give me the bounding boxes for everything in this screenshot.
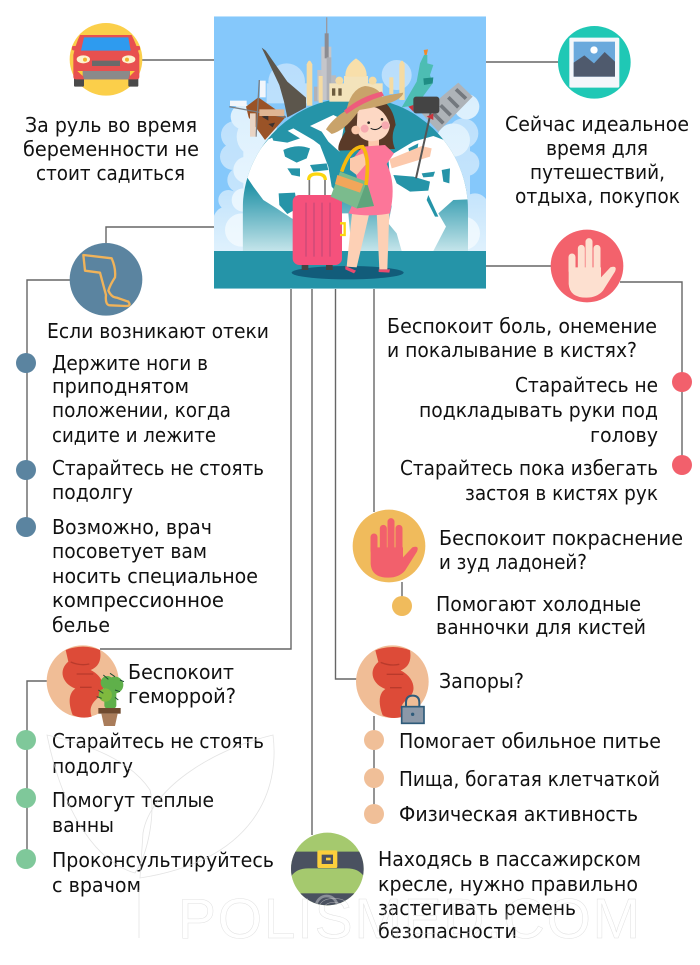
- text: ideal time: путешествий,: [530, 160, 665, 184]
- bullet: cold baths: Помогают холодные: [436, 592, 641, 616]
- bullet: do not stand: Старайтесь не стоять: [52, 729, 264, 753]
- hair: [338, 104, 396, 151]
- text: seat belt advice: Находясь в пассажирском: [378, 847, 641, 871]
- panel: wrist pain: [387, 314, 692, 505]
- heading: palm redness: [439, 526, 683, 574]
- bullet: do not stand: подолгу: [52, 480, 133, 504]
- icon: leg: [70, 243, 142, 316]
- bullet: avoid stagnation: застоя в кистях рук: [465, 481, 658, 505]
- bullet: compression wear: [16, 515, 258, 637]
- heading: wrist pain: и покалывание в кистях?: [387, 338, 637, 362]
- heading: wrist pain: Беспокоит боль, онемение: [387, 314, 657, 338]
- bullet: do not stand: [16, 456, 264, 504]
- arm with selfie stick: [389, 146, 432, 168]
- bullet: compression wear: Возможно, врач: [52, 515, 212, 539]
- text: driving warning: беременности не: [23, 137, 199, 161]
- text: ideal time: [505, 112, 689, 208]
- icon: picture: [558, 26, 631, 99]
- landmark: Burj tower: [314, 17, 336, 101]
- landmark: windmill: [229, 80, 286, 140]
- landmark: Eiffel tower: [262, 48, 306, 117]
- globe: [243, 97, 468, 251]
- heading: hemorrhoids: геморрой?: [128, 684, 236, 708]
- heading: hemorrhoids: Беспокоит: [128, 660, 234, 684]
- bullet: warm baths: ванны: [52, 813, 114, 837]
- bullet: elevate legs: [16, 351, 231, 447]
- watermark: POLISMED.COM: [178, 887, 640, 951]
- text: seat belt advice: кресле, нужно правильно: [378, 872, 638, 896]
- central illustration: traveling pregnant woman: [213, 16, 488, 289]
- bullet: cold baths: ванночки для кистей: [436, 615, 646, 639]
- pot: [98, 708, 121, 714]
- icon: car: [70, 23, 142, 96]
- bullet: hands under head: Старайтесь не: [515, 373, 658, 397]
- icon: intestine with cactus: [47, 645, 124, 726]
- bullet: hands under head: подкладывать руки под: [419, 398, 658, 422]
- bullet: elevate legs: приподнятом: [52, 374, 189, 398]
- heading: wrist pain: [387, 314, 657, 362]
- landmark: Statue of Liberty: [402, 49, 433, 107]
- icon: raised hand red: [551, 230, 623, 302]
- icon: intestine with lock: [356, 645, 429, 723]
- text: driving warning: [23, 113, 199, 185]
- bullet: fiber: Пища, богатая клетчаткой: [399, 767, 660, 791]
- legs: [347, 213, 369, 267]
- heading: swelling: Если возникают отеки: [47, 319, 269, 343]
- text: seat belt advice: застегивать ремень: [378, 896, 576, 920]
- bullet: elevate legs: Держите ноги в: [52, 351, 208, 375]
- continents: [243, 115, 468, 251]
- text: ideal time: отдыха, покупок: [515, 184, 680, 208]
- heading: hemorrhoids: [128, 660, 236, 708]
- bullet: consult doctor: Проконсультируйтесь: [52, 848, 274, 872]
- panel: hemorrhoids: [16, 660, 274, 897]
- bullet: avoid stagnation: Старайтесь пока избегать: [400, 456, 658, 480]
- bullet: do not stand: подолгу: [52, 754, 133, 778]
- landmark: Taj Mahal: [307, 58, 405, 106]
- bullet: drinking: Помогает обильное питье: [399, 729, 661, 753]
- bullet: do not stand: Старайтесь не стоять: [52, 456, 264, 480]
- bullet: compression wear: носить специальное: [52, 564, 258, 588]
- heading: constipation: Запоры?: [439, 669, 524, 693]
- bullet: hands under head: голову: [590, 423, 658, 447]
- suitcase: [309, 180, 325, 197]
- bullet: warm baths: Помогут теплые: [52, 788, 214, 812]
- cactus: [107, 677, 123, 693]
- icon: raised hand yellow: [353, 510, 425, 582]
- lakes and coastlines: [271, 131, 450, 217]
- text: seat belt advice: [378, 847, 641, 943]
- clouds: [213, 60, 488, 253]
- bullet: consult doctor: [16, 848, 274, 897]
- ground: [214, 251, 486, 289]
- bullet: do not stand: [16, 729, 264, 778]
- text: driving warning: За руль во время: [25, 113, 197, 137]
- bullet: activity: Физическая активность: [399, 802, 638, 826]
- face: [357, 106, 390, 141]
- panel: palm redness: [392, 526, 683, 639]
- shadow: [292, 266, 404, 279]
- connector lines: [27, 60, 682, 860]
- watermark: [47, 735, 640, 951]
- text: ideal time: время для: [546, 136, 648, 160]
- green bag: [331, 172, 374, 208]
- bullet: warm baths: [16, 788, 214, 837]
- landmark: leaning tower: [422, 83, 473, 132]
- sandals: [345, 266, 356, 273]
- bullet: cold baths: [392, 592, 646, 639]
- sky: [214, 16, 486, 289]
- lock: [406, 696, 419, 707]
- icon: seat belt: [291, 832, 364, 906]
- bullet: hands under head: [419, 372, 692, 447]
- bullet: avoid stagnation: [400, 455, 692, 505]
- heading: palm redness: Беспокоит покраснение: [439, 526, 683, 550]
- hat: [326, 93, 403, 134]
- woman: [292, 86, 439, 279]
- panel: constipation: [364, 669, 661, 826]
- bullet: consult doctor: с врачом: [52, 873, 141, 897]
- heading: palm redness: и зуд ладоней?: [439, 550, 587, 574]
- bullet: compression wear: посоветует вам: [52, 539, 207, 563]
- text: ideal time: Сейчас идеальное: [505, 112, 689, 136]
- bullet: compression wear: компрессионное: [52, 588, 224, 612]
- bullet: elevate legs: сидите и лежите: [52, 423, 216, 447]
- dress: [348, 145, 394, 215]
- text: seat belt advice: безопасности: [378, 919, 517, 943]
- panel: swelling: [16, 319, 269, 637]
- neck: [368, 140, 379, 146]
- text: driving warning: стоит садиться: [36, 161, 185, 185]
- bullet: compression wear: белье: [52, 613, 110, 637]
- bullet: elevate legs: положении, когда: [52, 398, 231, 422]
- selfie stick: [416, 108, 432, 178]
